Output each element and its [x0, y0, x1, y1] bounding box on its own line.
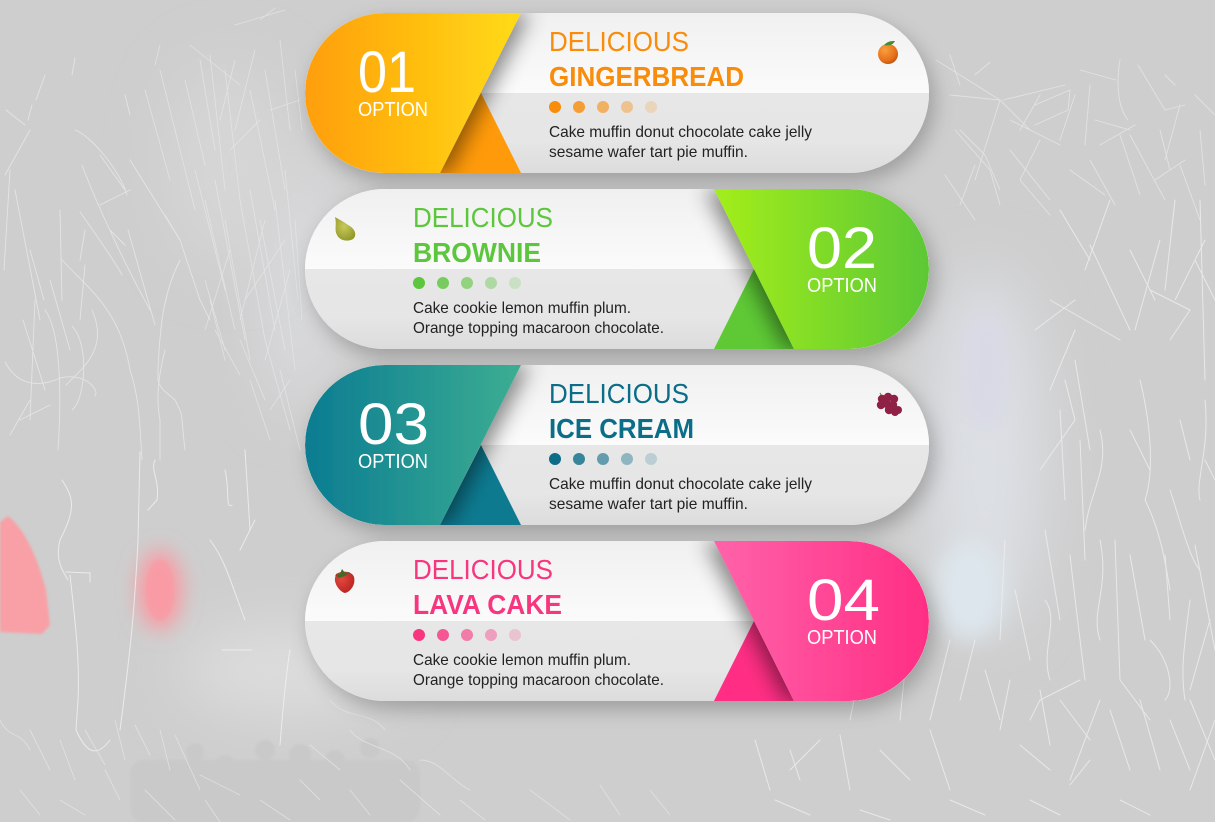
card 2 heading: BROWNIE	[413, 237, 541, 268]
card 4 heading: LAVA CAKE	[413, 589, 562, 620]
card 2 description	[413, 300, 664, 337]
card 1 pill base	[305, 13, 929, 173]
card 2 number: OPTION	[807, 275, 877, 297]
card 3 fold triangle	[440, 445, 521, 525]
card 1 fold triangle	[440, 93, 521, 173]
card 4 fold triangle	[714, 621, 794, 701]
card 4 colour tab	[714, 541, 929, 701]
card 4 description	[413, 652, 664, 689]
card 2 heading: DELICIOUS	[413, 202, 553, 233]
card 3 heading: DELICIOUS	[549, 378, 689, 409]
card 4 pill base	[305, 541, 929, 701]
card 2 colour tab	[714, 189, 929, 349]
card 3 heading: ICE CREAM	[549, 413, 694, 444]
card 1 heading	[549, 26, 744, 92]
card 4 heading	[413, 554, 562, 620]
icon: orange	[878, 41, 898, 64]
card 3 number: 03	[358, 392, 429, 457]
card 3 description: sesame wafer tart pie muffin.	[549, 496, 748, 513]
card 2 pill base	[305, 189, 929, 349]
card 3 pill base	[305, 365, 929, 525]
card 1 number: 01	[358, 40, 416, 105]
card 4 rating dots	[413, 629, 521, 641]
card 3 number: OPTION	[358, 451, 428, 473]
card 3 heading	[549, 378, 694, 444]
card 2 heading	[413, 202, 553, 268]
card 4 description: Cake cookie lemon muffin plum.	[413, 652, 631, 669]
card 4 number: 04	[807, 568, 880, 633]
card 1 rating dots	[549, 101, 657, 113]
card 1: gingerbread	[305, 13, 929, 173]
card 2 number: 02	[807, 216, 877, 281]
card 3 colour tab	[305, 365, 521, 525]
card 2 fold triangle	[714, 269, 794, 349]
card 2 description: Orange topping macaroon chocolate.	[413, 320, 664, 337]
card 2 description: Cake cookie lemon muffin plum.	[413, 300, 631, 317]
icon: pear	[335, 217, 355, 241]
card 2: brownie	[305, 189, 929, 349]
card 4 number: OPTION	[807, 627, 877, 649]
icon: grapes	[877, 393, 902, 416]
card 1 description: sesame wafer tart pie muffin.	[549, 144, 748, 161]
card 3 description: Cake muffin donut chocolate cake jelly	[549, 476, 812, 493]
card 4 heading: DELICIOUS	[413, 554, 553, 585]
card 1 heading: DELICIOUS	[549, 26, 689, 57]
card 3 rating dots	[549, 453, 657, 465]
card 1 description: Cake muffin donut chocolate cake jelly	[549, 124, 812, 141]
card 4 description: Orange topping macaroon chocolate.	[413, 672, 664, 689]
card 2 rating dots	[413, 277, 521, 289]
card 3: ice cream	[305, 365, 929, 525]
icon: strawberry	[335, 569, 354, 593]
card 3 description	[549, 476, 812, 513]
card 1 description	[549, 124, 812, 161]
card 1 colour tab	[305, 13, 521, 173]
card 4: lava cake	[305, 541, 929, 701]
card 1 heading: GINGERBREAD	[549, 61, 744, 92]
card 1 number: OPTION	[358, 99, 428, 121]
